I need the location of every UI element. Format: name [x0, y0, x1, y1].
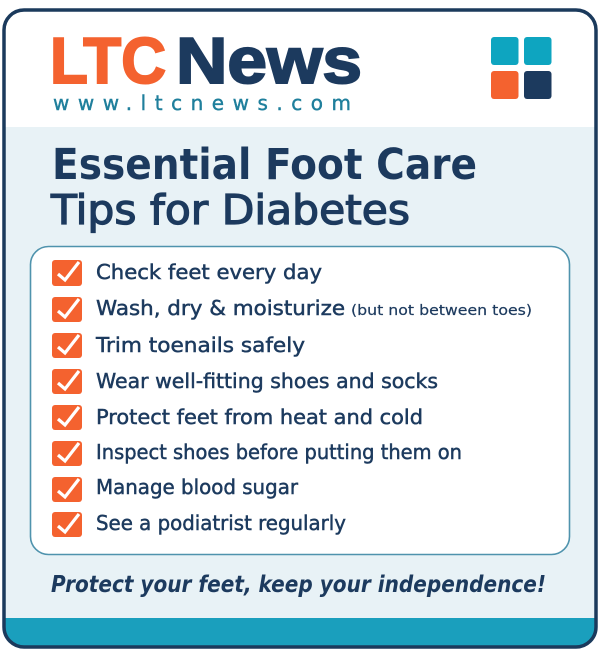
checklist item 2: (but not between toes)	[351, 303, 532, 319]
panel: background	[6, 127, 594, 646]
checklist item 2: Wash, dry & moisturize	[96, 296, 345, 320]
checklist item 7: Manage blood sugar	[96, 475, 299, 499]
checklist item 1: Check feet every day	[96, 260, 322, 284]
logo wordmark	[50, 24, 362, 97]
checklist item 5: Protect feet from heat and cold	[96, 405, 423, 429]
website url: www.ltcnews.com	[53, 91, 351, 115]
logo wordmark: News	[176, 24, 362, 97]
panel: checklist	[30, 246, 570, 554]
checklist item 6: Inspect shoes before putting them on	[96, 440, 462, 464]
logo wordmark: LTC	[50, 24, 166, 97]
checklist item 3: Trim toenails safely	[95, 333, 305, 357]
title: Essential Foot Care	[52, 141, 477, 190]
checklist item 2	[52, 296, 532, 322]
checklist item 4: Wear well-fitting shoes and socks	[96, 369, 438, 393]
icon: four-square logo	[491, 37, 552, 99]
checklist item 8: See a podiatrist regularly	[96, 511, 346, 535]
title: Tips for Diabetes	[50, 186, 410, 234]
title	[50, 141, 477, 234]
